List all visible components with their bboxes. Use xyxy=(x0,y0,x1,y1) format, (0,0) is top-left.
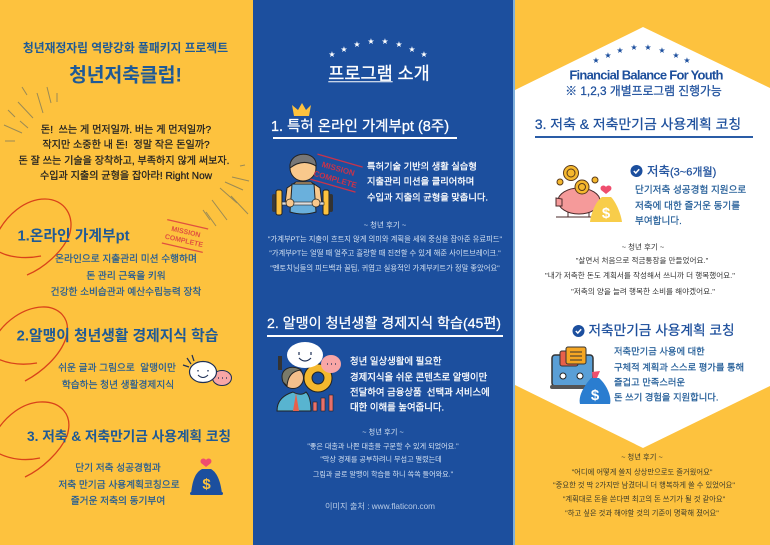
text: section 2 reviews: "좋은 대출과 나쁜 대출을 구분할 수 있게 되었어요." xyxy=(307,442,459,450)
maturity title: 저축만기금 사용계획 코칭 xyxy=(588,323,735,338)
text: maturity reviews: ~ 청년 후기 ~ xyxy=(621,452,663,461)
icon: check badge xyxy=(572,325,584,337)
text: item 2 description: 쉬운 글과 그림으로 알맹이만 xyxy=(58,363,176,374)
stars arc: ★ xyxy=(672,51,680,60)
text: savings reviews: ~ 청년 후기 ~ xyxy=(622,242,664,251)
heading 2: 2.알맹이 청년생활 경제지식 학습 xyxy=(17,329,218,345)
stamp: mission complete: MISSION xyxy=(171,226,201,239)
heading: financial balance: Financial Balance For Youth xyxy=(569,68,723,82)
text: savings block: 저축에 대한 즐거운 동기를 xyxy=(635,201,740,212)
text: maturity reviews: "어디에 어떻게 쓸지 상상만으로도 즐거웠어요" xyxy=(572,467,712,476)
intro text xyxy=(18,124,229,182)
text: section 1 description: 수입과 지출의 균형을 맞춥니다. xyxy=(367,192,488,202)
text: item 2 description: 학습하는 청년 생활경제지식 xyxy=(62,380,174,391)
icon: money bag: $ xyxy=(202,476,211,493)
icon: money bag xyxy=(190,458,223,495)
divider xyxy=(267,335,503,337)
text: maturity description: 돈 쓰기 경험을 지원합니다. xyxy=(614,392,718,402)
icon: laptop chat and money bag: $ xyxy=(591,387,600,404)
text: savings reviews: "내가 저축한 돈도 계획서를 작성해서 쓰니까 더 행복했어요." xyxy=(545,271,735,280)
icon: piggy bank and coins xyxy=(556,165,622,222)
stamp: mission complete xyxy=(162,219,208,253)
savings title: 저축(3~6개월) xyxy=(647,164,716,178)
text: section 1 description xyxy=(367,161,488,202)
icon: speech bubbles xyxy=(182,354,232,386)
stars arc: ★ xyxy=(683,56,691,65)
icon: laptop chat and money bag xyxy=(550,346,610,404)
text: section 2 description: 경제지식을 쉬운 콘텐츠로 알맹이만 xyxy=(350,371,487,382)
text: item 1 description: 온라인으로 지출관리 미션 수행하며 xyxy=(55,254,197,265)
text: section 2 description xyxy=(350,355,490,412)
stars arc xyxy=(592,43,691,65)
text: image credit: 이미지 출처 : www.flaticon.com xyxy=(325,502,435,511)
text: section 2 description: 전달하여 금융상품 선택과 서비스에 xyxy=(350,386,490,397)
text: maturity description: 저축만기금 사용에 대한 xyxy=(614,346,705,356)
text: item 3 description: 단기 저축 성공경험과 xyxy=(75,463,161,474)
panel: centre column xyxy=(267,37,503,511)
icon: piggy bank and coins: $ xyxy=(602,205,611,222)
text: maturity reviews: "중요한 것 딱 2가지만 남겼더니 더 행복하게 쓸 수 있었어요" xyxy=(553,480,735,489)
text: section 2 reviews: ~ 청년 후기 ~ xyxy=(362,427,404,436)
text: savings block xyxy=(630,164,746,227)
text: savings reviews xyxy=(545,242,735,296)
icon: weightlifter with stamp: COMPLETE xyxy=(313,169,358,190)
panel: right yellow background xyxy=(513,0,770,545)
stars arc xyxy=(328,37,428,59)
stamp: mission complete: COMPLETE xyxy=(164,234,204,249)
decorative burst lines xyxy=(4,86,250,226)
subtitle: 청년재정자립 역량강화 풀패키지 프로젝트 xyxy=(23,41,228,55)
stars arc: ★ xyxy=(644,43,652,52)
icon: man with speech bubbles and gear xyxy=(276,342,341,412)
icon: weightlifter with stamp: MISSION xyxy=(321,160,356,178)
text: section 1 reviews: "멘토치님들의 피드백과 꿀팁, 귀엽고 실용적인 가계부키트가 정말 좋았어요" xyxy=(270,263,500,272)
intro text: 수입과 지출의 균형을 잡아라! Right Now xyxy=(40,171,212,182)
stars arc: ★ xyxy=(408,45,416,54)
text: maturity description: 즐겁고 만족스러운 xyxy=(614,377,685,387)
heading: section 3: 3. 저축 & 저축만기금 사용계획 코칭 xyxy=(535,116,741,132)
text: item 3 description xyxy=(58,462,180,507)
text: item 1 description xyxy=(51,254,202,298)
subheading: ※ 1,2,3 개별프로그램 진행가능 xyxy=(565,84,722,98)
icon: crown xyxy=(292,103,311,116)
text: section 2 reviews xyxy=(307,427,459,478)
text: section 2 reviews: 그림과 글로 알맹이 학습을 하니 쏙쏙 들어와요." xyxy=(313,470,453,478)
divider xyxy=(535,136,753,138)
stars arc: ★ xyxy=(420,50,428,59)
panel: right column xyxy=(535,43,753,517)
text: maturity reviews: "계획대로 돈을 쓴다면 최고의 돈 쓰기가 될 것 같아요" xyxy=(563,494,725,503)
divider xyxy=(273,137,457,139)
text: maturity reviews: "하고 싶은 것과 해야할 것의 기준이 명확해 졌어요" xyxy=(565,508,719,517)
stars arc: ★ xyxy=(604,51,612,60)
text: maturity description: 구체적 계획과 스스로 평가를 통해 xyxy=(614,362,744,372)
text: item 2 description xyxy=(58,362,176,391)
heading: program intro: 프로그램 소개 xyxy=(328,63,430,83)
heading 1: 1.온라인 가계부pt xyxy=(17,229,130,245)
intro text: 돈 잘 쓰는 기술을 장착하고, 부족하지 않게 써보자. xyxy=(19,156,229,167)
text: section 1 description: 특허기술 기반의 생활 실습형 xyxy=(367,161,477,171)
text: item 3 description: 즐거운 저축의 동기부여 xyxy=(71,496,165,507)
text: section 1 description: 지출관리 미션을 클리어하며 xyxy=(367,176,474,186)
panel: left yellow background xyxy=(0,0,253,545)
panel: left column xyxy=(0,41,250,507)
stars arc: ★ xyxy=(328,50,336,59)
text: section 1 reviews: ~ 청년 후기 ~ xyxy=(364,220,406,229)
text: section 1 reviews xyxy=(268,220,502,272)
text: item 1 description: 돈 관리 근육을 키워 xyxy=(86,271,166,282)
text: item 3 description: 저축 만기금 사용계획코칭으로 xyxy=(58,480,180,491)
stars arc: ★ xyxy=(340,45,348,54)
text: section 1 reviews: "가계부PT는 지출이 흐트지 않게 의미와 계획을 세워 중심을 잡아준 유료피드" xyxy=(268,234,502,243)
savings description: 단기저축 성공경험 지원으로 xyxy=(635,185,746,196)
intro text: 돈! 쓰는 게 먼저일까. 버는 게 먼저일까? xyxy=(41,125,211,136)
icon: check badge xyxy=(630,165,642,177)
stars arc: ★ xyxy=(353,40,361,49)
heading: section 2: 2. 알맹이 청년생활 경제지식 학습(45편) xyxy=(267,315,501,331)
stars arc: ★ xyxy=(616,46,624,55)
heading: section 1: 1. 특허 온라인 가계부pt (8주) xyxy=(271,119,449,135)
stars arc: ★ xyxy=(658,46,666,55)
heading 3: 3. 저축 & 저축만기금 사용계획 코칭 xyxy=(27,429,231,444)
text: maturity description xyxy=(614,346,744,402)
text: section 2 reviews: "막상 경제를 공부하려니 무섭고 떨렸는데 xyxy=(320,455,442,463)
text: savings reviews: "저축의 양을 늘려 행복한 소비를 해야겠어요." xyxy=(571,287,715,296)
text: maturity reviews xyxy=(553,452,735,517)
intro text: 작지만 소중한 내 돈! 정말 작은 돈일까? xyxy=(42,140,210,151)
stars arc: ★ xyxy=(367,37,375,46)
text: section 1 reviews: "가계부PT는 얼떨 때 얼주고 흘랑할 때 진전할 수 있게 해준 사이트브레이크." xyxy=(269,248,501,257)
text: section 2 description: 청년 일상생활에 필요한 xyxy=(350,355,441,366)
panel: centre blue background xyxy=(253,0,513,545)
red hand-drawn circles xyxy=(0,198,72,478)
subheading: maturity coaching xyxy=(572,323,735,338)
text: section 2 description: 대한 이해를 높여줍니다. xyxy=(350,401,444,412)
text: savings reviews: "살면서 처음으로 적금통장을 만들었어요." xyxy=(576,256,708,265)
title: 청년저축클럽! xyxy=(69,65,182,86)
stars arc: ★ xyxy=(630,43,638,52)
text: item 1 description: 건강한 소비습관과 예산수립능력 장착 xyxy=(51,287,201,298)
stars arc: ★ xyxy=(395,40,403,49)
stars arc: ★ xyxy=(592,56,600,65)
stars arc: ★ xyxy=(381,37,389,46)
text: savings block: 부여합니다. xyxy=(635,216,682,227)
icon: weightlifter with stamp xyxy=(272,154,363,216)
